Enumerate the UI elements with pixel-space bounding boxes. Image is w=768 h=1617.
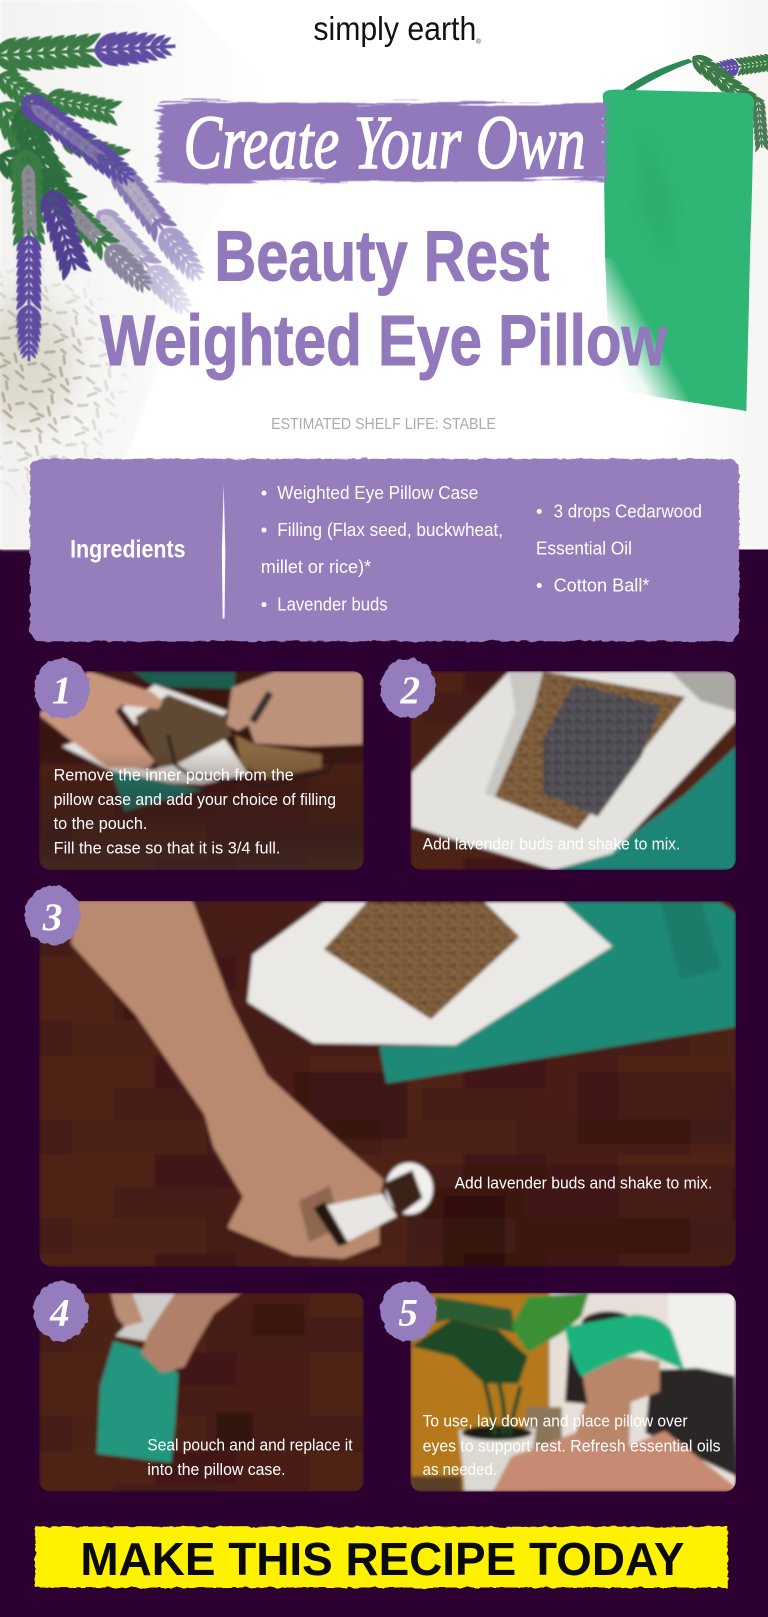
ingredients list left: Weighted Eye Pillow Case — [277, 482, 478, 503]
ingredients list left — [261, 482, 503, 614]
heading banner: Create Your Own: Create Your Own — [183, 100, 586, 185]
panel: step 2 — [410, 671, 736, 870]
step 3 photo — [39, 901, 737, 1268]
badge: step 5 — [380, 1281, 436, 1341]
step 5 caption: eyes to support rest. Refresh essential oils — [423, 1437, 721, 1455]
step 4 caption — [147, 1436, 353, 1479]
step 2 photo — [410, 671, 736, 870]
shelf life note: ESTIMATED SHELF LIFE: STABLE — [271, 416, 496, 433]
ingredients list right: 3 drops Cedarwood — [554, 500, 702, 521]
badge: step 4 — [33, 1281, 89, 1341]
panel: step 3 — [39, 901, 737, 1268]
ingredients list left: • — [261, 593, 267, 614]
ingredients list left: Filling (Flax seed, buckwheat, — [277, 519, 503, 540]
badge: step 4: 4 — [49, 1292, 70, 1335]
step 1 caption: Fill the case so that it is 3/4 full. — [54, 840, 280, 858]
badge: step 5: 5 — [398, 1292, 418, 1335]
step 5 caption: To use, lay down and place pillow over — [423, 1413, 688, 1431]
logo: simply earth: simply earth — [313, 10, 476, 47]
ingredients heading: Ingredients — [70, 537, 186, 564]
ingredients list right: • — [536, 500, 543, 521]
step 4 photo — [39, 1293, 364, 1492]
ingredients list right — [536, 500, 702, 596]
badge: step 1 — [34, 659, 90, 719]
header photo background — [0, 0, 768, 549]
step 4 caption: into the pillow case. — [147, 1461, 286, 1479]
ingredients list left: millet or rice)* — [261, 556, 371, 577]
panel: step 1 — [38, 671, 364, 870]
ingredients list left: • — [261, 519, 267, 540]
step 1 caption: Remove the inner pouch from the — [54, 766, 294, 784]
step 1 caption: pillow case and add your choice of filling — [54, 791, 336, 809]
ingredients list left: Lavender buds — [277, 593, 388, 614]
badge: step 2 — [380, 659, 436, 719]
call to action: MAKE THIS RECIPE TODAY — [80, 1533, 685, 1585]
panel: step 5 — [410, 1293, 736, 1492]
badge: step 3: 3 — [42, 896, 62, 939]
lavender seeds scatter — [0, 263, 128, 492]
ingredients list left: • — [261, 482, 267, 503]
step 5 photo — [410, 1293, 736, 1492]
panel: ingredients — [30, 459, 739, 641]
badge: step 2: 2 — [399, 669, 420, 712]
panel: step 4 — [39, 1293, 364, 1492]
ingredients list right: Cotton Ball* — [554, 575, 649, 596]
step 5 caption — [423, 1413, 721, 1479]
badge: step 3 — [25, 886, 80, 945]
step 2 caption: Add lavender buds and shake to mix. — [423, 835, 680, 853]
step 1 caption: to the pouch. — [54, 815, 147, 833]
ingredients list right: • — [536, 575, 543, 596]
title: Beauty Rest — [214, 217, 549, 296]
step 1 caption — [54, 766, 336, 858]
title — [100, 217, 668, 381]
icon: green eye pillow — [582, 46, 768, 428]
step 5 caption: as needed. — [423, 1461, 497, 1479]
icon: lavender sprigs left — [0, 26, 253, 366]
ingredients list right: Essential Oil — [536, 538, 632, 559]
badge: step 1: 1 — [52, 669, 72, 712]
logo: simply earth: ® — [476, 38, 481, 45]
step 4 caption: Seal pouch and and replace it — [147, 1436, 353, 1454]
step 3 caption: Add lavender buds and shake to mix. — [455, 1175, 712, 1193]
step 1 photo — [38, 671, 364, 870]
